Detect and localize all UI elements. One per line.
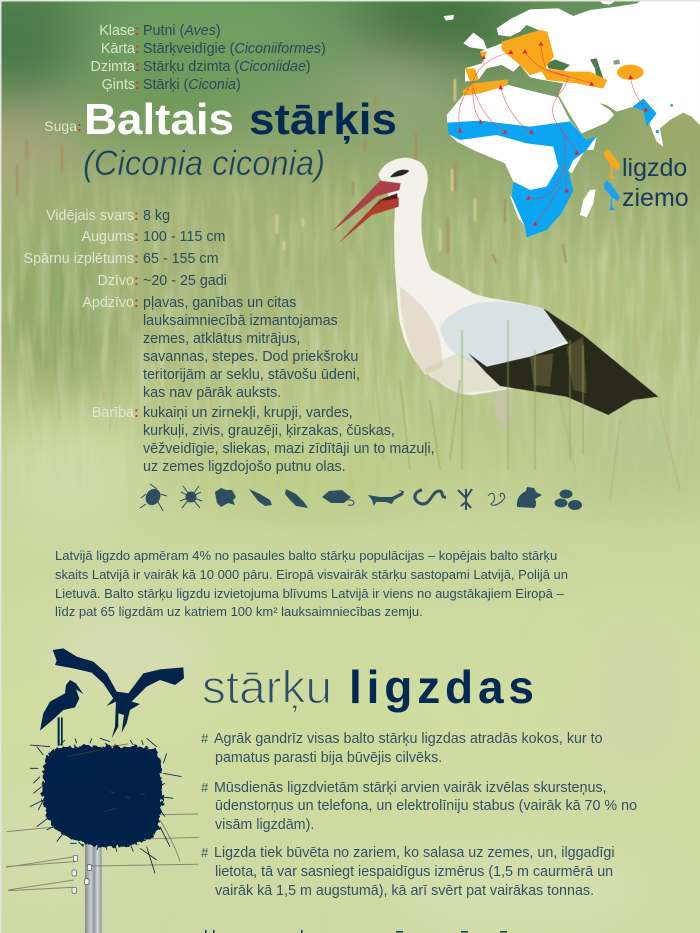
meadow over tail (530, 337, 587, 393)
habitat: kas nav pārāk auksts. (143, 385, 281, 401)
insulators (72, 823, 92, 893)
nest brown twig details (67, 744, 145, 812)
fact 1: pamatus parasti bija būvējis cilvēks. (215, 750, 442, 766)
nest facts list (201, 731, 637, 899)
fact 3: lietota, tā var sasniegt iespaidīgus izmērus (1,5 m caurmērā un (215, 864, 613, 880)
fact 3 (201, 845, 615, 899)
icon: frog (215, 488, 236, 507)
intro paragraph: līdz pat 65 ligzdām uz katriem 100 km² lauksaimniecības zemju. (55, 604, 423, 619)
nest twigs (30, 738, 182, 873)
fact 2 (201, 780, 637, 833)
order row: Kārta (101, 41, 135, 57)
family row: : (135, 59, 140, 75)
lifespan: ~20 - 25 gadi (143, 273, 227, 289)
weight: : (134, 208, 139, 224)
taxonomy block (91, 23, 326, 93)
genus row: Stārķi (Ciconia) (143, 77, 241, 93)
height: 100 - 115 cm (143, 229, 225, 245)
height (82, 229, 225, 245)
diet: kukaiņi un zirnekļi, krupji, vardes, (143, 405, 353, 421)
icon: rodent (322, 490, 354, 505)
stork lower belly tint (400, 287, 443, 375)
standing stork (40, 680, 83, 746)
height: : (134, 229, 139, 245)
legend: breeding stork icon (603, 149, 620, 179)
habitat: Apdzīvo (82, 295, 134, 311)
heading: nests: ligzdas (349, 661, 534, 713)
diet: : (134, 405, 139, 421)
icon: beetle (140, 484, 167, 511)
map: migration routes (459, 43, 646, 223)
nest body (42, 745, 162, 847)
map: route markers (458, 41, 648, 226)
black flight feathers (468, 308, 658, 415)
title: stārķis (249, 95, 397, 144)
icon: eggs (554, 490, 582, 510)
weight: 8 kg (143, 208, 170, 224)
facts block (24, 208, 435, 475)
stork legs (450, 387, 513, 430)
habitat: zemes, atklātus mitrājus, (143, 331, 300, 347)
class row: Klase (99, 23, 135, 39)
upper bill (332, 181, 401, 232)
fact 3: Ligzda tiek būvēta no zariem, ko salasa uz zemes, un, ilggadīgi (214, 845, 615, 861)
map: land (443, 0, 700, 228)
wingspan (24, 251, 218, 267)
diet icons row (140, 484, 582, 511)
fact 2: # (201, 780, 209, 795)
lifespan (97, 273, 227, 289)
class row: : (135, 23, 140, 39)
map: wintering range (447, 98, 673, 237)
power line wires (6, 814, 199, 891)
order row: : (135, 41, 140, 57)
diet: uz zemes ligzdojošo putnu olas. (143, 459, 346, 475)
family row: Stārķu dzimta (Ciconiidae) (143, 59, 311, 75)
fact 3: vairāk kā 1,5 m augstumā), kā arī svērt pat vairākas tonnas. (215, 883, 594, 899)
weight: Vidējais svars (46, 208, 134, 224)
habitat: savannas, stepes. Dod priekšroku (143, 349, 358, 365)
habitat: : (134, 295, 139, 311)
lifespan: : (134, 273, 139, 289)
wingspan: 65 - 155 cm (143, 251, 218, 267)
gape (368, 193, 397, 212)
fact 1: # (201, 731, 209, 746)
class row (99, 23, 221, 39)
class row: Putni (Aves) (143, 23, 221, 39)
map legend: breeding: ligzdo (622, 154, 687, 182)
habitat (82, 295, 360, 401)
intro paragraph: skaits Latvijā ir vairāk kā 10 000 pāru. Eiropā visvairāk stārķu sastopami Latvijā, Polijā un (55, 567, 568, 582)
habitat: pļavas, ganības un citas (143, 295, 296, 311)
diet: vēžveidīgie, sliekas, mazi zīdītāji un to mazuļi, (143, 441, 435, 457)
heading: nests (202, 661, 534, 713)
icon: tadpole (249, 489, 272, 506)
icon: lizard (368, 490, 404, 506)
heading: nests: stārķu (202, 661, 332, 713)
icon: spider (180, 486, 202, 508)
fact 1: Agrāk gandrīz visas balto stārķu ligzdas atradās kokos, kur to (214, 731, 603, 747)
eye patch (390, 170, 409, 177)
diet: kurkuļi, zivis, grauzēji, ķirzakas, čūskas, (143, 423, 395, 439)
fact 1 (201, 731, 603, 766)
background: grass texture (2, 172, 700, 446)
title (84, 95, 397, 144)
habitat: lauksaimniecībā izmantojamas (143, 313, 338, 329)
habitat: teritorijām ar seklu, stāvošu ūdeni, (143, 367, 360, 383)
fact 2: visām ligzdām). (215, 817, 314, 833)
diet (92, 405, 435, 475)
lower body fading into grass (423, 353, 530, 393)
order row: Stārķveidīgie (Ciconiiformes) (143, 41, 326, 57)
flying stork (53, 648, 184, 738)
family row: Dzimta (91, 59, 135, 75)
power pole (85, 837, 102, 933)
fact 2: Mūsdienās ligzdvietām stārķi arvien vairāk izvēlas skursteņus, (214, 780, 607, 796)
intro paragraph: Latvijā ligzdo apmēram 4% no pasaules balto stārķu populācijas – kopējais balto stārķu (55, 548, 557, 563)
intro paragraph (55, 548, 568, 619)
icon: crayfish (458, 489, 472, 510)
clipped next heading marks (205, 930, 507, 933)
stork body (378, 158, 570, 395)
map: inland seas (547, 58, 620, 80)
background: grass stems (17, 80, 680, 500)
species label: Suga (44, 118, 77, 134)
icon: rabbit (517, 487, 542, 508)
map: breeding range (463, 30, 644, 96)
wingspan: : (134, 251, 139, 267)
fact 2: ūdenstorņus un telefona, un elektrolīniju stabus (vairāk kā 70 % no (215, 798, 637, 814)
latin name: (Ciconia ciconia) (83, 144, 325, 183)
lower bill (338, 197, 399, 243)
legend: wintering stork icon (603, 180, 620, 210)
stork wing shade (440, 302, 568, 367)
genus row: Ģints (102, 77, 135, 93)
icon: worms (488, 493, 505, 505)
genus row: : (135, 77, 140, 93)
lifespan: Dzīvo (97, 273, 134, 289)
nest illustration (6, 648, 199, 933)
map legend: wintering: ziemo (622, 184, 689, 212)
grass over stork (400, 320, 583, 470)
photo: white stork (332, 158, 658, 430)
intro paragraph: Lietuvā. Balto stārķu ligzdu izvietojuma blīvums Latvijā ir viens no augstākajiem Eiropā – (55, 586, 564, 601)
fact 3: # (201, 845, 209, 860)
range map (443, 0, 700, 237)
icon: snake (415, 490, 446, 504)
icon: fish (285, 489, 308, 508)
diet: Barība (92, 405, 134, 421)
species label: : (77, 118, 82, 134)
title: Baltais (84, 95, 234, 144)
height: Augums (82, 229, 134, 245)
wingspan: Spārnu izplētums (24, 251, 134, 267)
